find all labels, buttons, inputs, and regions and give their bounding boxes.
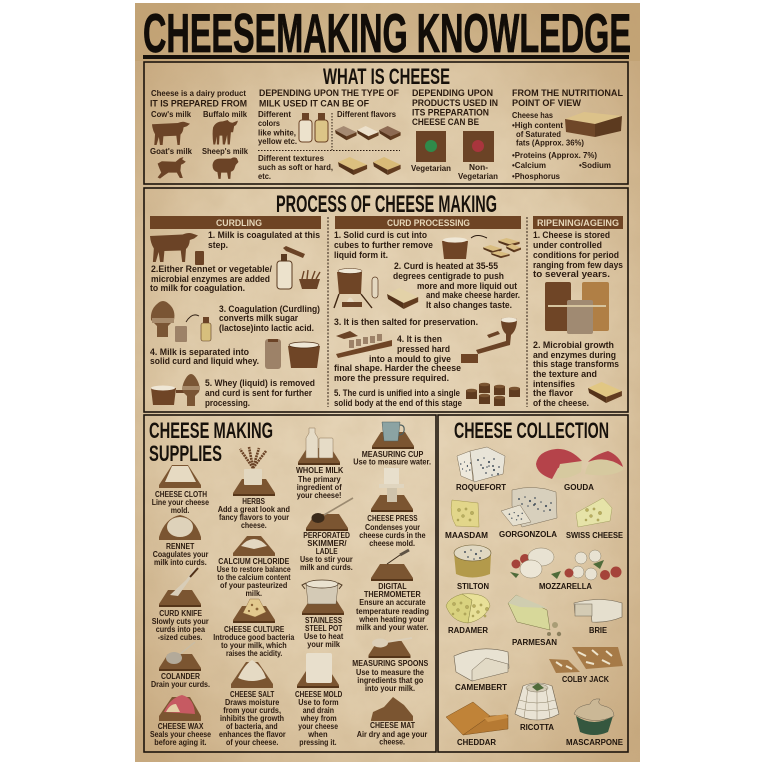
column: milk type: MILK USED IT CAN BE OF (259, 98, 369, 108)
supply: herbs: HERBS (242, 497, 266, 506)
column: curdling: processing. (205, 398, 250, 408)
column: nutritional point of view: •Sodium (579, 160, 611, 170)
cheese: swiss cheese (566, 498, 624, 540)
supply: rennet (153, 515, 208, 567)
column: curd processing: CURD PROCESSING (387, 218, 470, 228)
heading: cheese making supplies: CHEESE MAKING (149, 418, 273, 443)
cheese: maasdam: MAASDAM (445, 531, 488, 540)
supply: cheese wax: before aging it. (154, 738, 207, 747)
cheese: mozzarella: MOZZARELLA (539, 582, 592, 591)
column: prepared from: Sheep's milk (202, 146, 248, 156)
cheese: radamer (446, 594, 490, 635)
column: curdling: 2.Either Rennet or vegetable/ (151, 264, 272, 274)
supply: measuring cup: MEASURING CUP (362, 450, 424, 459)
column: curdling: to milk for coagulation. (150, 283, 245, 293)
cheese: parmesan (508, 595, 561, 647)
supply: cheese wax: CHEESE WAX (158, 722, 204, 731)
supply: cheese culture (213, 599, 295, 658)
supply: measuring spoons: MEASURING SPOONS (352, 659, 429, 668)
cheese: mozzarella (510, 548, 622, 591)
supply: cheese mold: your cheese (298, 722, 339, 731)
supply: stainless steel pot: STAINLESS (305, 616, 343, 625)
cheese: parmesan: PARMESAN (512, 638, 557, 647)
supply: rennet: Coagulates your (153, 550, 208, 559)
supply: cheese culture: Introduce good bacteria (213, 633, 295, 642)
column: milk type: such as soft or hard, (258, 162, 333, 172)
column: curdling: 4. Milk is separated into (150, 347, 249, 357)
supply: cheese mold: Use to form (298, 698, 339, 707)
column: milk type: Different (258, 109, 291, 119)
column: curd processing: 1. Solid curd is cut into (334, 230, 427, 240)
poster background (135, 3, 640, 762)
cheese: ricotta (515, 683, 559, 732)
supply: cheese press (359, 468, 426, 548)
supply: digital thermometer: temperature reading (356, 607, 429, 616)
column: curd processing: 2. Curd is heated at 35-55 (394, 261, 498, 271)
supply: cheese salt (219, 660, 286, 747)
supply: cheese mat (357, 697, 427, 746)
title rule (143, 55, 629, 59)
supply: cheese salt: of your cheese. (226, 738, 278, 747)
column: milk type: like white, (258, 128, 296, 138)
column: curdling: 5. Whey (liquid) is removed (205, 378, 315, 388)
supply: colander (151, 642, 210, 689)
column: ripening and ageing: this stage transforms (533, 359, 619, 369)
column: curd processing: solid body at the end of this stage (334, 398, 462, 408)
column: milk type: Different flavors (337, 109, 396, 119)
supply: cheese mold: pressing it. (299, 738, 337, 747)
heading: what is cheese: WHAT IS CHEESE (323, 64, 450, 89)
column: ripening and ageing: the texture and (533, 369, 597, 379)
column: ripening and ageing: to several years. (533, 269, 610, 279)
supply: perforated skimmer ladle: PERFORATED (303, 531, 350, 540)
column: ripening and ageing: intensifies (533, 379, 575, 389)
supply: herbs: fancy flavors to your (219, 513, 289, 522)
column: nutritional point of view: FROM THE NUTRITIONAL (512, 88, 623, 98)
column: ripening and ageing: of the cheese. (533, 398, 589, 408)
column: curdling: converts milk sugar (219, 313, 298, 323)
column: curdling: step. (208, 240, 228, 250)
supply: cheese salt: CHEESE SALT (230, 690, 274, 699)
supply: calcium chloride: to the calcium content (217, 573, 291, 582)
supply: rennet: RENNET (166, 542, 194, 551)
column: nutritional point of view: •Calcium (512, 160, 546, 170)
supply: cheese mat: CHEESE MAT (370, 721, 415, 730)
cheese: colby jack: COLBY JACK (562, 675, 609, 684)
column: curd processing: pressed hard (397, 344, 450, 354)
supply: colander: Drain your curds. (151, 680, 210, 689)
supply: curd knife: CURD KNIFE (159, 609, 203, 618)
column: curd processing: 3. It is then salted for preservation. (334, 317, 478, 327)
supply: cheese press: cheese mold. (369, 539, 415, 548)
heading: cheese collection: CHEESE COLLECTION (454, 418, 609, 443)
supply: cheese salt: from your curds, (223, 706, 281, 715)
cheese: roquefort: ROQUEFORT (456, 483, 506, 492)
supply: curd knife: Slowly cuts your (152, 617, 209, 626)
column: ripening and ageing: 1. Cheese is stored (533, 230, 610, 240)
cheese: gorgonzola: GORGONZOLA (499, 530, 557, 539)
column: curd processing: It also changes taste. (426, 300, 512, 310)
supply: cheese culture: CHEESE CULTURE (224, 625, 285, 634)
panel: process of cheese making (144, 188, 628, 412)
column: curd processing: 5. The curd is unified into a single (334, 388, 460, 398)
panel: cheese collection (438, 415, 628, 752)
supply: cheese cloth: mold. (171, 506, 189, 515)
supply: cheese culture: raises the acidity. (226, 649, 282, 658)
supply: cheese wax: Seals your cheese (150, 730, 212, 739)
column: ripening and ageing: under controlled (533, 240, 602, 250)
supply: cheese mat: Air dry and age your (357, 730, 427, 739)
supply: cheese mold: and drain (303, 706, 334, 715)
supply: digital thermometer (356, 550, 429, 632)
supply: calcium chloride (217, 536, 291, 598)
supply: measuring spoons: Use to measure the (356, 668, 425, 677)
supply: cheese wax (150, 695, 212, 747)
supply: perforated skimmer ladle: milk and curds. (300, 563, 353, 572)
supply: calcium chloride: Use to restore balance (217, 565, 291, 574)
supply: stainless steel pot (302, 580, 344, 649)
column: milk type: colors (258, 118, 280, 128)
supply: cheese cloth: Line your cheese (152, 498, 210, 507)
column: prepared from: Cheese is a dairy product (151, 88, 246, 98)
column: ripening and ageing: conditions for period (533, 250, 619, 260)
cheese: colby jack (549, 647, 623, 684)
column: vegetarian: PRODUCTS USED IN (412, 98, 498, 108)
column: nutritional point of view: •Proteins (Approx. 7%) (512, 150, 597, 160)
supply: stainless steel pot: Use to heat (304, 632, 344, 641)
column: ripening and ageing (533, 216, 623, 408)
column: prepared from (150, 88, 248, 179)
supply: measuring spoons: ingredients that go (357, 676, 423, 685)
column: prepared from: Buffalo milk (203, 109, 247, 119)
supply: digital thermometer: DIGITAL (378, 582, 407, 591)
supply: stainless steel pot: STEEL POT (305, 624, 342, 633)
cheese: camembert: CAMEMBERT (455, 683, 507, 692)
supply: perforated skimmer ladle: Use to stir your (300, 555, 353, 564)
supply: colander: COLANDER (161, 672, 200, 681)
column: vegetarian: DEPENDING UPON (412, 88, 493, 98)
column: prepared from: Cow's milk (151, 109, 191, 119)
cheese: maasdam (445, 500, 488, 540)
column: nutritional point of view (512, 88, 623, 181)
supply: curd knife: curds into pea (156, 625, 206, 634)
column: curdling: microbial enzymes are added (151, 274, 270, 284)
supply: perforated skimmer ladle (300, 498, 353, 572)
supply: cheese cloth (152, 465, 210, 515)
heading: cheese making supplies: SUPPLIES (149, 441, 222, 466)
supply: measuring cup: Use to measure water. (353, 458, 431, 466)
column: nutritional point of view: •Phosphorus (512, 171, 560, 181)
column: prepared from: Goat's milk (150, 146, 192, 156)
column: curd processing: final shape. Harder the cheese (334, 363, 461, 373)
cheese: stilton (454, 545, 491, 591)
cheese: mascarpone (566, 699, 624, 747)
column: ripening and ageing: 2. Microbial growth (533, 340, 614, 350)
cheese: cheddar: CHEDDAR (457, 738, 496, 747)
supply: cheese cloth: CHEESE CLOTH (155, 490, 207, 499)
column: curdling: solid curd and liquid whey. (150, 356, 259, 366)
supply: digital thermometer: milk and your water. (356, 623, 428, 632)
supply: digital thermometer: when heating your (358, 615, 425, 624)
column: ripening and ageing: the flavor (533, 388, 573, 398)
column: curd processing: degrees centigrade to push (393, 271, 504, 281)
column: milk type: DEPENDING UPON THE TYPE OF (259, 88, 399, 98)
supply: whole milk: ingredient of (297, 483, 342, 492)
column: nutritional point of view: POINT OF VIEW (512, 98, 581, 108)
supply: herbs: cheese. (241, 521, 267, 530)
supply: calcium chloride: milk. (246, 589, 262, 598)
supply: cheese culture: to your milk, which (221, 641, 287, 650)
supply: cheese salt: inhibits the growth (220, 714, 284, 723)
column: curdling: CURDLING (216, 218, 262, 228)
supply: perforated skimmer ladle: LADLE (316, 547, 338, 556)
column: prepared from: IT IS PREPARED FROM (150, 98, 247, 108)
column: vegetarian: ITS PREPARATION (412, 108, 489, 118)
column: nutritional point of view: fats (Approx. 36%) (516, 138, 584, 148)
column: curdling (150, 216, 321, 408)
cheese: camembert (454, 649, 509, 692)
supply: herbs: Add a great look and (218, 505, 290, 514)
supply: cheese mold: when (307, 730, 328, 739)
column: curd processing: cubes to further remove (334, 240, 433, 250)
supply: digital thermometer: Ensure an accurate (359, 598, 426, 607)
column: curd processing: more and more liquid out (417, 281, 517, 291)
column: curd processing: into a mould to give (369, 354, 451, 364)
supply: curd knife (152, 566, 209, 642)
supply: calcium chloride: of your pasteurized (220, 581, 287, 590)
column: nutritional point of view: of Saturated (516, 129, 561, 139)
supply: cheese salt: Draws moisture (225, 698, 280, 707)
supply: curd knife: -sized cubes. (158, 633, 202, 642)
cheese: stilton: STILTON (457, 582, 489, 591)
column: milk type (258, 88, 401, 181)
supply: cheese mold: whey from (300, 714, 337, 723)
column: curd processing: liquid form it. (334, 250, 388, 260)
column: vegetarian: Vegetarian (458, 171, 498, 181)
column: vegetarian: CHEESE CAN BE (412, 117, 479, 127)
cheese: gorgonzola (499, 487, 557, 539)
supply: cheese press: CHEESE PRESS (367, 514, 418, 523)
cheese: ricotta: RICOTTA (520, 723, 554, 732)
supply: cheese press: Condenses your (365, 523, 420, 532)
column: milk type: etc. (258, 171, 271, 181)
column: curdling: (lactose)into lactic acid. (219, 323, 314, 333)
supply: calcium chloride: CALCIUM CHLORIDE (218, 557, 290, 566)
column: vegetarian: Vegetarian (411, 163, 451, 173)
supply: measuring spoons (352, 638, 429, 693)
heading: cheese making supplies (149, 418, 273, 466)
supply: cheese mold (295, 653, 342, 747)
supply: cheese salt: of bacteria, and (226, 722, 278, 731)
supply: cheese press: cheese curds in the (359, 531, 426, 540)
cheese: brie (574, 600, 622, 635)
cheese: radamer: RADAMER (448, 626, 488, 635)
column: curdling: 3. Coagulation (Curdling) (219, 304, 320, 314)
cheese: brie: BRIE (589, 626, 608, 635)
supply: whole milk: WHOLE MILK (296, 466, 344, 475)
supply: cheese salt: enhances the flavor (219, 730, 286, 739)
supply: measuring spoons: into your milk. (365, 684, 415, 693)
panel: what is cheese (144, 62, 628, 184)
cheese: cheddar (446, 702, 508, 747)
column: ripening and ageing: ranging from few days (533, 260, 623, 270)
column: milk type: yellow etc. (258, 136, 297, 146)
cheese: gouda: GOUDA (564, 483, 594, 492)
cheese: mascarpone: MASCARPONE (566, 738, 624, 747)
column: curd processing: 4. It is then (397, 334, 442, 344)
column: milk type: Different textures (258, 153, 324, 163)
supply: rennet: milk into curds. (154, 558, 207, 567)
column: curdling: and curd is sent for further (205, 388, 312, 398)
supply: cheese mold: CHEESE MOLD (295, 690, 342, 699)
supply: cheese mat: cheese. (379, 738, 405, 746)
column: curd processing: more the pressure required. (334, 373, 449, 383)
cheese: gouda (536, 449, 623, 492)
supply: whole milk: your cheese! (297, 491, 341, 500)
column: nutritional point of view: •High content (512, 120, 563, 130)
column: ripening and ageing: and enzymes during (533, 350, 616, 360)
supply: digital thermometer: THERMOMETER (364, 590, 421, 599)
supply: measuring cup (353, 422, 431, 466)
cheese: swiss cheese: SWISS CHEESE (566, 531, 624, 540)
cheese: roquefort (456, 447, 506, 492)
heading: process of cheese making: PROCESS OF CHEESE MAKING (276, 191, 497, 218)
column: ripening and ageing: RIPENING/AGEING (537, 218, 619, 228)
column: curdling: 1. Milk is coagulated at this (208, 230, 320, 240)
supply: whole milk: The primary (298, 475, 341, 484)
column: curd processing (334, 216, 521, 408)
supply: stainless steel pot: your milk (307, 640, 341, 649)
supply: herbs (218, 447, 290, 530)
column: vegetarian (411, 88, 498, 181)
column: curd processing: and make cheese harder. (426, 290, 520, 300)
supply: perforated skimmer ladle: SKIMMER/ (307, 539, 347, 548)
supply: whole milk (296, 428, 344, 500)
panel: cheese making supplies (144, 415, 436, 752)
column: nutritional point of view: Cheese has (512, 110, 553, 120)
column: vegetarian: Non- (469, 162, 488, 172)
